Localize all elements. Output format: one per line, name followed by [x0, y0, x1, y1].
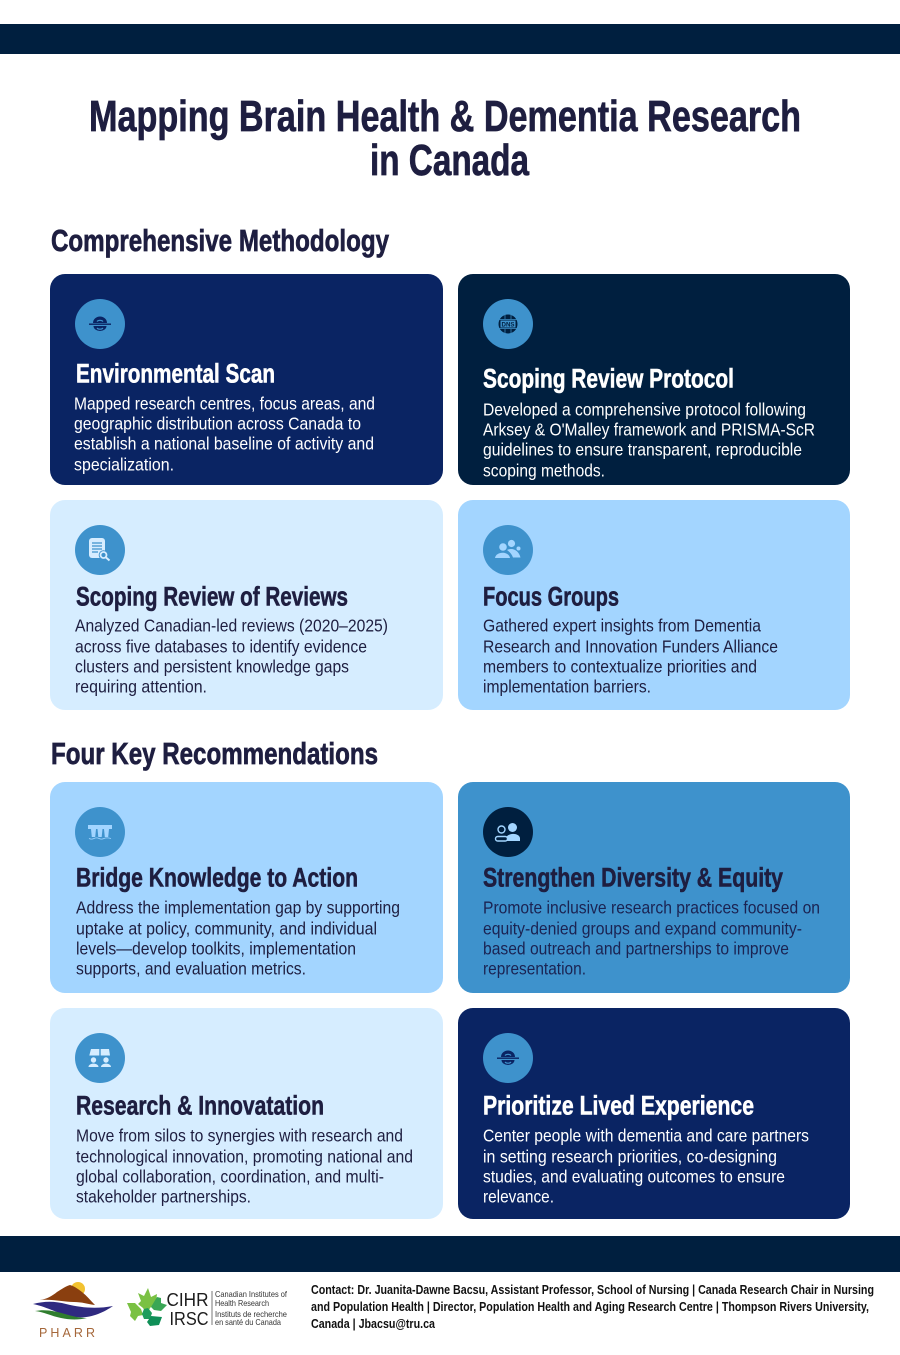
card text: Move from silos to synergies with research and: [76, 1126, 403, 1146]
card text: [483, 1126, 809, 1206]
icon: DNS globe: [483, 299, 533, 349]
panel: Scoping Review Protocol: [458, 274, 850, 485]
card title: Focus Groups: [483, 581, 619, 611]
title: [89, 92, 801, 185]
heading: Comprehensive Methodology: Comprehensive Methodology: [51, 223, 390, 258]
card text: [75, 616, 388, 696]
contact text: Canada | Jbacsu@tru.ca: [311, 1317, 436, 1331]
card text: supports, and evaluation metrics.: [76, 958, 306, 978]
panel: Environmental Scan: [50, 274, 443, 485]
card text: [76, 1126, 413, 1206]
contact text: [311, 1283, 874, 1331]
logo: PHARR: [33, 1282, 113, 1340]
card text: uptake at policy, community, and individual: [76, 918, 377, 938]
card text: [74, 394, 375, 474]
icon: bridge: [75, 807, 125, 857]
card text: technological innovation, promoting national and: [76, 1146, 413, 1166]
card text: Mapped research centres, focus areas, and: [74, 394, 375, 414]
card title: Strengthen Diversity & Equity: [483, 862, 783, 892]
title: in Canada: [370, 136, 529, 185]
logo: CIHR IRSC: IRSC: [170, 1308, 208, 1329]
card text: requiring attention.: [75, 676, 207, 696]
card text: studies, and evaluating outcomes to ensure: [483, 1166, 785, 1186]
card text: across five databases to identify evidence: [75, 636, 367, 656]
card text: Research and Innovation Funders Alliance: [483, 636, 778, 656]
card text: levels—develop toolkits, implementation: [76, 938, 356, 958]
card title: Scoping Review of Reviews: [76, 581, 348, 611]
card title: Research & Innovatation: [76, 1090, 324, 1120]
logo: CIHR IRSC: [127, 1288, 288, 1329]
panel: Scoping Review of Reviews: [50, 500, 443, 710]
icon: group of people: [483, 525, 533, 575]
card text: based outreach and partnerships to improve: [483, 938, 789, 958]
card text: [483, 898, 820, 978]
panel: Bridge Knowledge to Action: [50, 782, 443, 993]
logo: CIHR IRSC: CIHR: [166, 1289, 208, 1310]
icon: scan: [75, 299, 125, 349]
card text: Developed a comprehensive protocol following: [483, 400, 806, 420]
card title: Environmental Scan: [76, 358, 275, 388]
card text: guidelines to ensure transparent, reproducible: [483, 440, 802, 460]
panel: Strengthen Diversity & Equity: [458, 782, 850, 993]
card text: clusters and persistent knowledge gaps: [75, 656, 349, 676]
card text: Gathered expert insights from Dementia: [483, 616, 761, 636]
card text: [76, 898, 400, 978]
card text: geographic distribution across Canada to: [74, 414, 361, 434]
card text: Arksey & O'Malley framework and PRISMA-ScR: [483, 420, 815, 440]
card text: Analyzed Canadian-led reviews (2020–2025): [75, 616, 388, 636]
panel: Research & Innovatation: [50, 1008, 443, 1219]
card title: Scoping Review Protocol: [483, 363, 734, 393]
panel: Focus Groups: [458, 500, 850, 710]
top band: [0, 24, 900, 54]
logo: CIHR IRSC: Health Research: [215, 1298, 269, 1308]
card title: Bridge Knowledge to Action: [76, 862, 358, 892]
card title: Prioritize Lived Experience: [483, 1090, 754, 1120]
icon: diverse people: [483, 807, 533, 857]
heading: Four Key Recommendations: Four Key Recommendations: [51, 736, 378, 771]
bottom band: [0, 1236, 900, 1272]
card text: implementation barriers.: [483, 676, 651, 696]
icon: people with book: [75, 1033, 125, 1083]
card text: in setting research priorities, co-designing: [483, 1146, 777, 1166]
card text: Address the implementation gap by supporting: [76, 898, 400, 918]
card text: specialization.: [74, 454, 174, 474]
card text: relevance.: [483, 1186, 554, 1206]
logo: CIHR IRSC: en santé du Canada: [215, 1317, 281, 1327]
card text: [483, 616, 778, 696]
card text: Center people with dementia and care partners: [483, 1126, 809, 1146]
logo: CIHR IRSC: Instituts de recherche: [215, 1309, 287, 1319]
card text: representation.: [483, 958, 586, 978]
card text: global collaboration, coordination, and multi-: [76, 1166, 384, 1186]
card text: establish a national baseline of activity and: [74, 434, 374, 454]
card text: Promote inclusive research practices focused on: [483, 898, 820, 918]
card text: stakeholder partnerships.: [76, 1186, 251, 1206]
icon: maple leaf: [127, 1288, 167, 1326]
panel: Prioritize Lived Experience: [458, 1008, 850, 1219]
logo: PHARR: PHARR: [39, 1326, 95, 1340]
icon: DNS globe: DNS: [502, 321, 515, 328]
icon: scan: [483, 1033, 533, 1083]
logo: CIHR IRSC: Canadian Institutes of: [215, 1289, 288, 1299]
card text: equity-denied groups and expand community-: [483, 918, 802, 938]
card text: scoping methods.: [483, 460, 605, 480]
icon: document search: [75, 525, 125, 575]
card text: [483, 400, 815, 480]
card text: members to contextualize priorities and: [483, 656, 757, 676]
